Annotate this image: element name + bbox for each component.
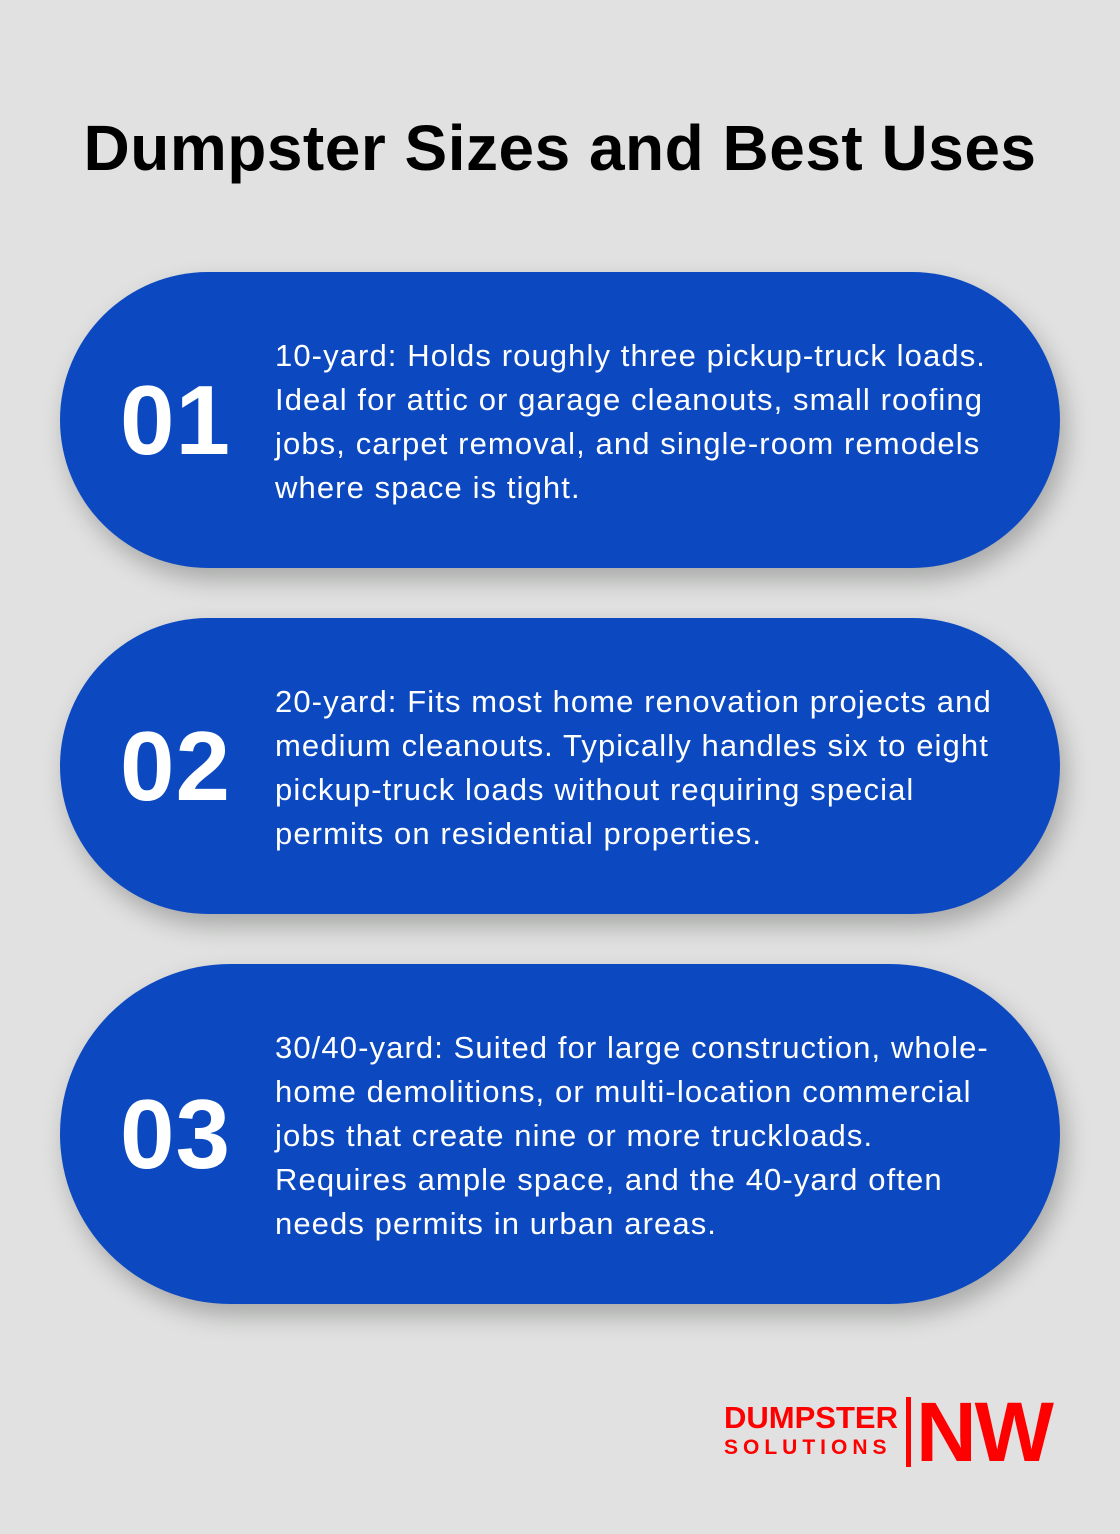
text 1: 10-yard: Holds roughly three pickup-truck loads. — [275, 338, 986, 373]
number 02: 02 — [120, 711, 231, 821]
card 3 — [60, 964, 1060, 1304]
card 2 — [60, 618, 1060, 914]
text 3 — [274, 1030, 989, 1241]
card 1 — [60, 272, 1060, 568]
title: Dumpster Sizes and Best Uses — [84, 112, 1036, 184]
logo: NW — [916, 1385, 1052, 1479]
text 3: home demolitions, or multi-location commercial — [275, 1074, 972, 1109]
text 1 — [274, 338, 986, 505]
logo: SOLUTIONS — [724, 1436, 892, 1459]
text 3: 30/40-yard: Suited for large construction, whole- — [275, 1030, 989, 1065]
text 2: pickup-truck loads without requiring special — [275, 772, 914, 807]
text 2 — [275, 684, 992, 851]
text 2: 20-yard: Fits most home renovation projects and — [275, 684, 992, 719]
logo — [724, 1385, 1054, 1479]
text 3: jobs that create nine or more truckloads. — [275, 1118, 873, 1153]
text 1: where space is tight. — [275, 470, 581, 505]
text 1: jobs, carpet removal, and single-room remodels — [275, 426, 980, 461]
text 1: Ideal for attic or garage cleanouts, small roofing — [275, 382, 983, 417]
text 3: Requires ample space, and the 40-yard often — [275, 1162, 943, 1197]
number 03: 03 — [120, 1079, 231, 1189]
text 3: needs permits in urban areas. — [275, 1206, 717, 1241]
logo: DUMPSTER — [724, 1400, 898, 1435]
text 2: medium cleanouts. Typically handles six to eight — [275, 728, 989, 763]
number 01: 01 — [120, 365, 231, 475]
text 2: permits on residential properties. — [275, 816, 762, 851]
